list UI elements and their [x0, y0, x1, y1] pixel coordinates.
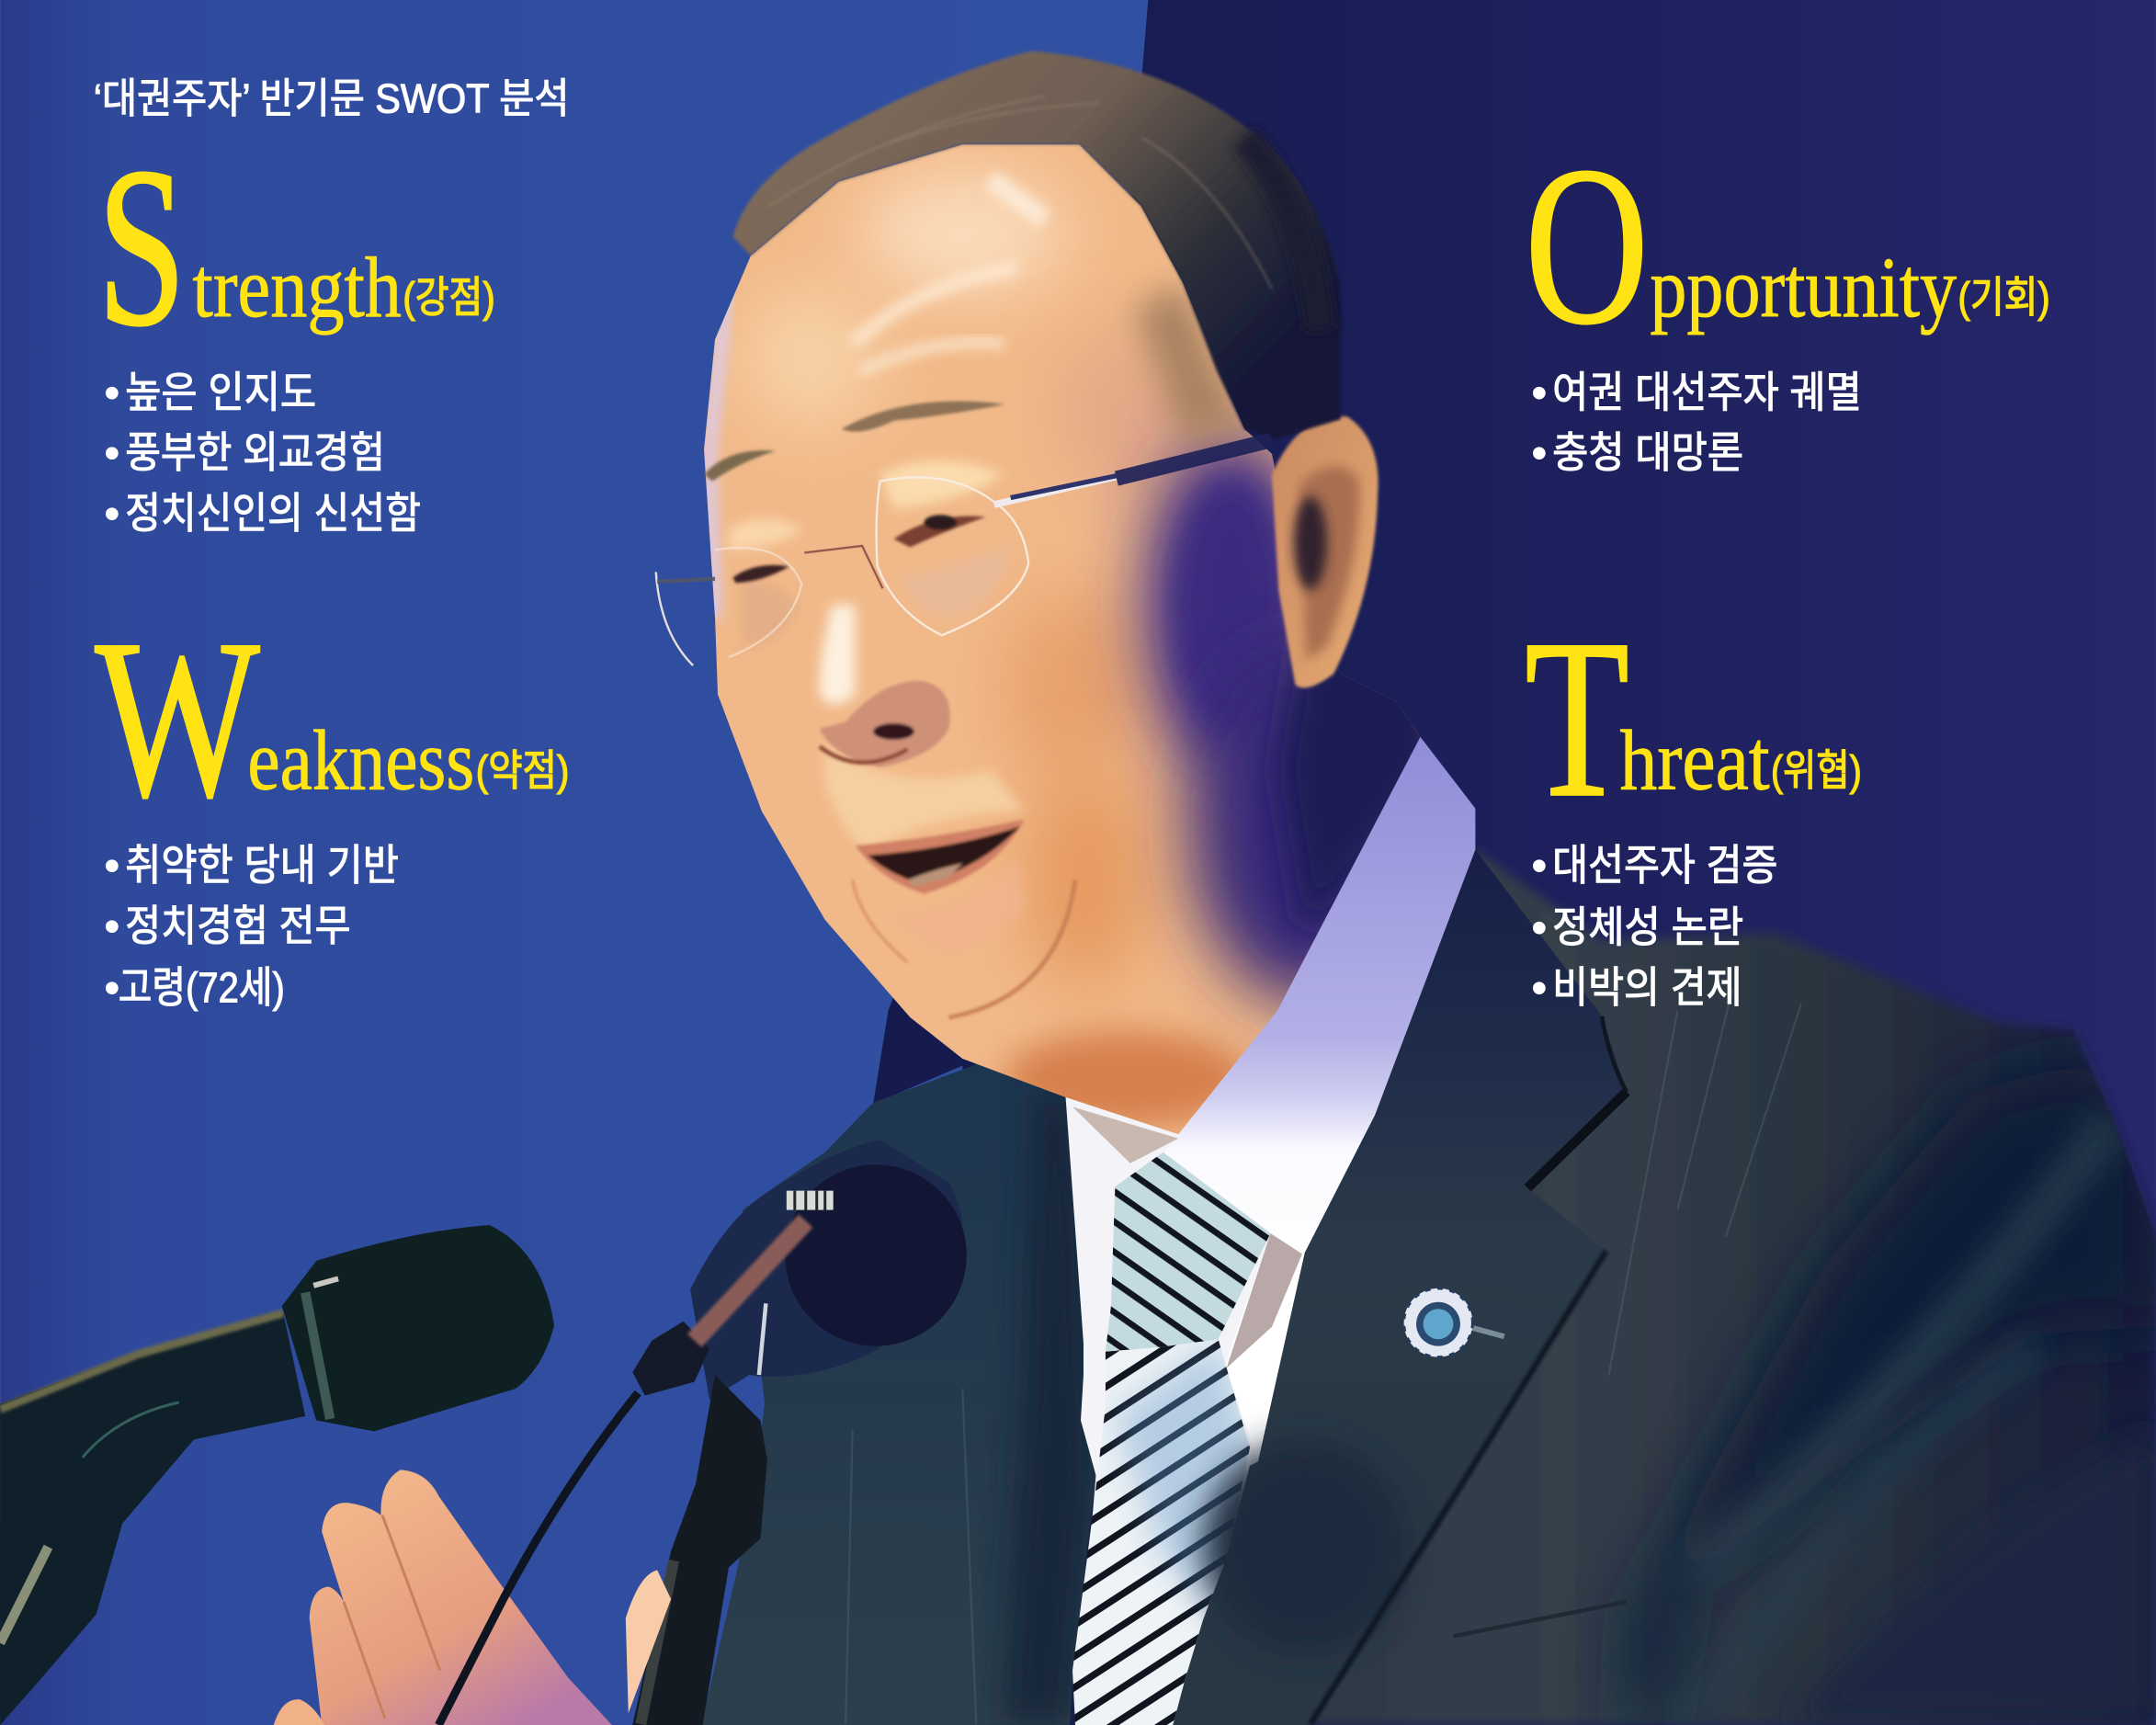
list: strengths: [105, 369, 421, 538]
title: ‘대권주자’ 반기문 SWOT 분석: [94, 75, 569, 122]
list: opportunities: •: [1532, 429, 1547, 477]
list: threats: [1532, 842, 1778, 1012]
heading: Opportunity: pportunity: [1650, 241, 1957, 335]
skin shading: [709, 172, 1444, 1128]
list: strengths: •: [105, 429, 119, 477]
list: weaknesses: 고령(72세): [119, 964, 285, 1012]
striped tie: [1072, 1152, 1270, 1725]
heading: Threat: [1525, 594, 1862, 845]
list: threats: •: [1532, 903, 1547, 951]
suit: shoulder and sleeve: [1314, 851, 2156, 1725]
list: threats: •: [1532, 964, 1547, 1012]
list: opportunities: •: [1532, 369, 1547, 416]
heading: Weakness: eakness: [247, 714, 474, 809]
heading: Weakness: W: [95, 594, 260, 845]
list: strengths: •: [105, 490, 119, 538]
heading: Threat: T: [1525, 594, 1629, 845]
list: weaknesses: 취약한 당내 기반: [125, 842, 399, 890]
lapel pin: [1404, 1288, 1504, 1357]
heading: Strength: trength: [193, 241, 402, 335]
list: opportunities: 충청 대망론: [1552, 429, 1743, 477]
microphone center: [632, 1140, 967, 1725]
heading: Opportunity: O: [1525, 120, 1649, 371]
suit: left shading: [1004, 1086, 1093, 1724]
heading: Strength: (강점): [403, 274, 495, 322]
list: strengths: 높은 인지도: [125, 369, 316, 416]
eyeglasses: [656, 440, 1272, 665]
heading: Strength: S: [97, 122, 186, 373]
nose: [820, 605, 950, 767]
lapel: [1173, 850, 1627, 1725]
list: threats: 정체성 논란: [1552, 903, 1743, 951]
list: weaknesses: [105, 842, 399, 1012]
list: opportunities: 여권 대선주자 궤멸: [1552, 369, 1862, 416]
pinstripes: [845, 990, 1801, 1724]
list: weaknesses: 정치경험 전무: [125, 902, 351, 949]
list: weaknesses: •: [105, 902, 119, 949]
microphone left: [0, 1225, 554, 1725]
raised hand: [274, 1393, 671, 1725]
background: dark navy right panel: [873, 0, 2156, 1725]
ear: [1272, 416, 1379, 687]
heading: Strength: [97, 122, 495, 373]
list: threats: 대선주자 검증: [1552, 842, 1778, 890]
list: strengths: •: [105, 369, 119, 416]
face and neck: [704, 144, 1444, 1139]
heading: Opportunity: (기회): [1958, 274, 2050, 322]
eyes: [732, 515, 986, 583]
heading: Weakness: [95, 594, 569, 845]
shirt collar: [1066, 737, 1475, 1724]
list: threats: •: [1532, 842, 1547, 890]
list: weaknesses: •: [105, 842, 119, 890]
list: threats: 비박의 견제: [1552, 964, 1742, 1012]
heading: Threat: hreat: [1619, 714, 1770, 809]
list: strengths: 풍부한 외교경험: [125, 429, 385, 477]
heading: Opportunity: [1525, 120, 2050, 371]
list: opportunities: [1532, 369, 1862, 477]
suit: left front: [701, 1062, 1095, 1725]
hair: [732, 51, 1341, 440]
list: strengths: 정치신인의 신선함: [125, 490, 421, 538]
heading: Threat: (위협): [1771, 746, 1862, 794]
list: weaknesses: •: [105, 964, 119, 1012]
heading: Weakness: (약점): [476, 746, 569, 794]
eyebrows: [704, 401, 1005, 482]
mouth: [853, 820, 1075, 1017]
